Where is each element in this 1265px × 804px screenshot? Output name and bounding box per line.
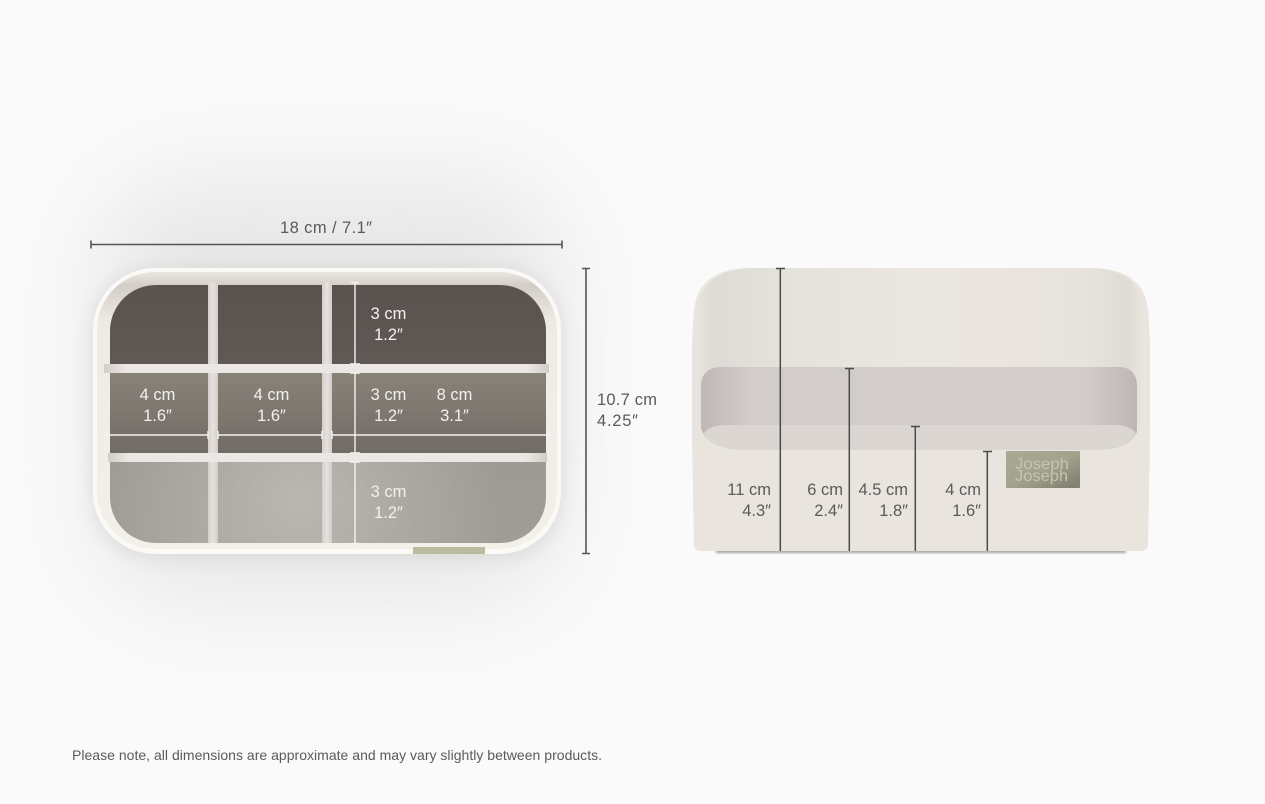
labels on top view: 1.2″	[374, 504, 403, 522]
labels on top view: 1.6″	[143, 407, 172, 425]
labels on top view: 3 cm	[371, 386, 406, 404]
recess floor	[704, 425, 1136, 450]
horizontal dividers	[104, 364, 549, 373]
brand plate: Joseph	[1015, 456, 1069, 473]
white measure lines on top view	[107, 282, 548, 544]
dimension: width 18 cm	[91, 219, 562, 248]
labels on top view: 1.6″	[257, 407, 286, 425]
labels on top view: 4 cm	[254, 386, 289, 404]
body	[692, 268, 1150, 551]
brand plate, top edge view	[413, 547, 485, 554]
ground shadow	[716, 550, 1126, 553]
labels on top view: 3 cm	[371, 305, 406, 323]
labels on top view	[140, 305, 472, 522]
brand plate	[1006, 451, 1080, 488]
inner recess	[701, 367, 1137, 450]
infographic canvas	[73, 170, 1150, 763]
background shadow behind the top view	[100, 180, 560, 600]
labels on top view: 1.2″	[374, 326, 403, 344]
labels on top view: 3 cm	[371, 483, 406, 501]
height labels on front view: 4.5 cm	[858, 481, 908, 499]
back wall	[696, 268, 1146, 425]
compartment floor	[110, 285, 546, 543]
height labels on front view: 11 cm	[727, 481, 771, 499]
outer shell	[93, 268, 561, 554]
labels on top view: 4 cm	[140, 386, 175, 404]
labels on top view: 3.1″	[440, 407, 469, 425]
labels on top view: 1.2″	[374, 407, 403, 425]
height labels on front view: 4.3″	[742, 502, 771, 520]
height labels on front view	[727, 481, 981, 520]
panel: front view of organiser	[692, 268, 1150, 553]
labels on top view: 8 cm	[437, 386, 472, 404]
dimension: depth 10.7 cm	[582, 268, 657, 554]
height measure lines	[776, 268, 992, 551]
height labels on front view: 6 cm	[807, 481, 843, 499]
height labels on front view: 4 cm	[945, 481, 981, 499]
footnote: Please note, all dimensions are approximate and may vary slightly between products.	[72, 747, 602, 763]
height labels on front view: 1.8″	[879, 502, 908, 520]
height labels on front view: 2.4″	[814, 502, 843, 520]
dimension: depth 10.7 cm: 10.7 cm	[597, 391, 657, 409]
vertical dividers	[208, 282, 218, 543]
height labels on front view: 1.6″	[952, 502, 981, 520]
panel: top view of organiser	[90, 268, 564, 560]
brand plate: Joseph	[1015, 468, 1068, 485]
dimension: depth 10.7 cm: 4.25″	[597, 412, 638, 430]
dimension: width 18 cm: 18 cm / 7.1″	[280, 219, 372, 237]
